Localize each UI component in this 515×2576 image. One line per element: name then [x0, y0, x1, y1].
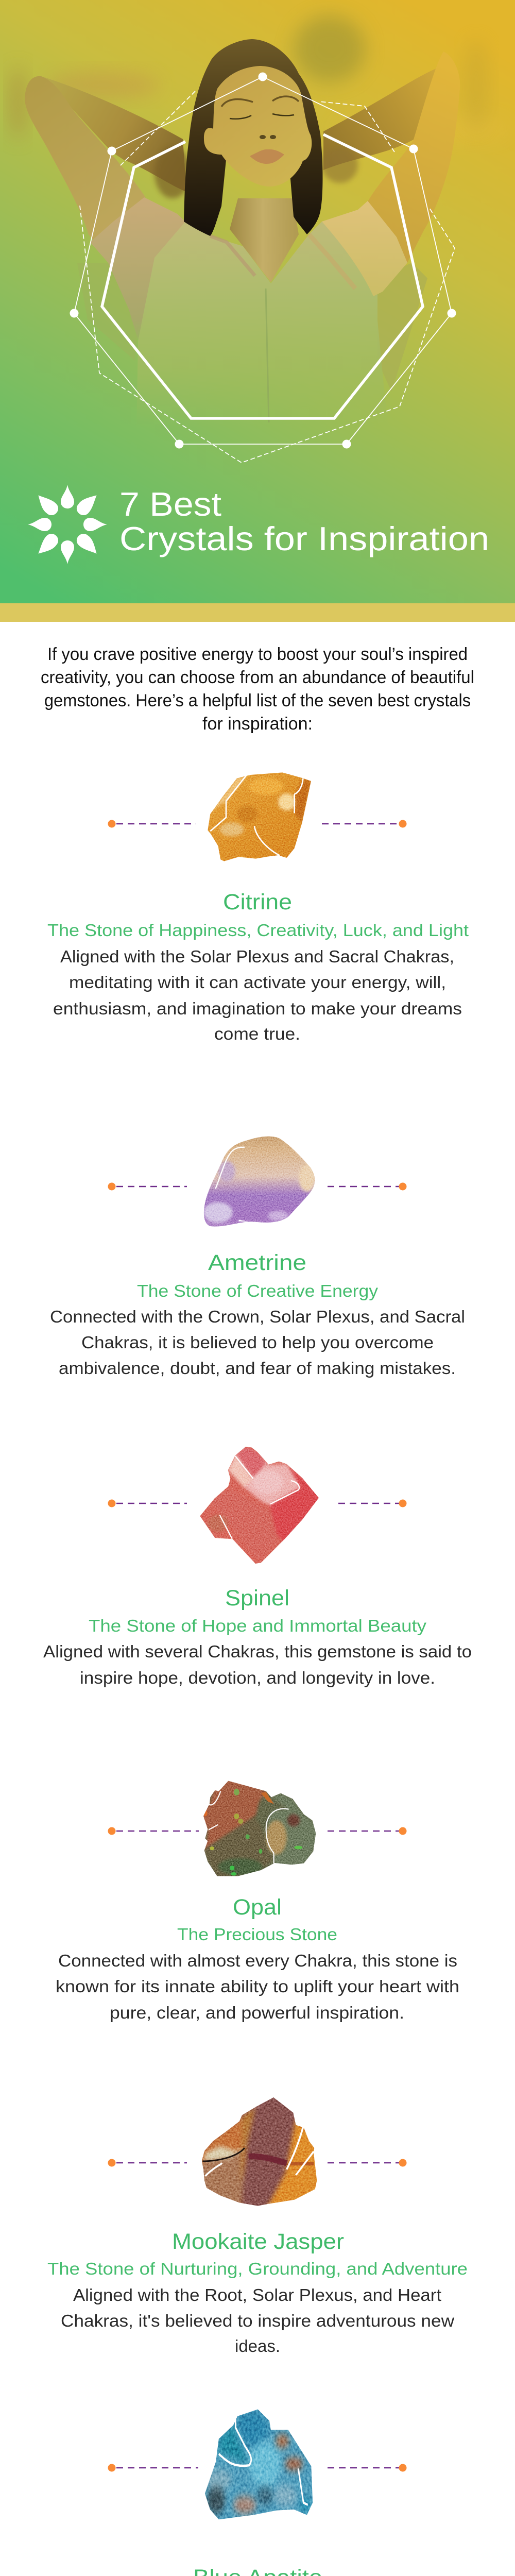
description: mookaite jasper: Chakras, it's believed to inspire adventurous new: [61, 2311, 454, 2330]
intro text: for inspiration:: [202, 714, 313, 734]
description: spinel: [43, 1642, 472, 1687]
description: ametrine: ambivalence, doubt, and fear of making mistakes.: [59, 1359, 456, 1378]
description: ametrine: [50, 1307, 465, 1378]
decorative heptagon: thick: [102, 134, 423, 418]
description: ametrine: Connected with the Crown, Solar Plexus, and Sacral: [50, 1307, 465, 1326]
heading: opal: Opal: [233, 1895, 282, 1920]
connector: citrine: [108, 820, 407, 827]
intro text: gemstones. Here’s a helpful list of the seven best crystals: [44, 691, 471, 710]
subheading: ametrine: The Stone of Creative Energy: [137, 1281, 379, 1300]
description: citrine: come true.: [214, 1024, 300, 1043]
description: opal: Connected with almost every Chakra, this stone is: [58, 1951, 457, 1970]
heading: spinel: Spinel: [225, 1586, 289, 1611]
description: spinel: Aligned with several Chakras, this gemstone is said to: [43, 1642, 472, 1661]
panel: Opal: [56, 1774, 459, 2022]
photo: woman relaxing with eyes closed: [25, 39, 460, 433]
panel: hero banner: [0, 0, 515, 622]
description: citrine: enthusiasm, and imagination to make your dreams: [53, 999, 462, 1018]
description: citrine: Aligned with the Solar Plexus and Sacral Chakras,: [60, 947, 454, 966]
icon: citrine crystal: [208, 772, 311, 861]
intro text: creativity, you can choose from an abundance of beautiful: [41, 668, 474, 687]
connector: ametrine: [108, 1183, 407, 1190]
description: mookaite jasper: ideas.: [235, 2336, 280, 2355]
panel: Blue Apatite: [108, 2409, 407, 2576]
heading: mookaite jasper: Mookaite Jasper: [172, 2229, 344, 2254]
subheading: mookaite jasper: The Stone of Nurturing, Grounding, and Adventure: [47, 2259, 468, 2278]
logo: white petal star: [28, 485, 107, 564]
decorative heptagon: thin with nodes: [70, 72, 456, 448]
intro text: [41, 645, 474, 734]
icon: ametrine crystal: [204, 1137, 315, 1227]
heading: citrine: Citrine: [223, 890, 292, 914]
heading: ametrine: Ametrine: [208, 1250, 306, 1275]
panel: Mookaite Jasper: [47, 2087, 468, 2355]
intro text: If you crave positive energy to boost your soul’s inspired: [47, 645, 468, 664]
icon: opal crystal: [203, 1781, 316, 1876]
description: mookaite jasper: [61, 2285, 454, 2355]
connector: opal: [108, 1827, 407, 1835]
description: citrine: meditating with it can activate your energy, will,: [69, 973, 446, 992]
decorative heptagon: dashed: [80, 91, 455, 463]
description: citrine: [53, 947, 462, 1043]
title: 7 Best: [119, 485, 221, 523]
description: ametrine: Chakras, it is believed to help you overcome: [81, 1333, 434, 1352]
blurred room background: [10, 15, 510, 143]
gold band: [0, 603, 515, 622]
subheading: citrine: The Stone of Happiness, Creativity, Luck, and Light: [47, 921, 469, 940]
title: [119, 485, 489, 557]
description: mookaite jasper: Aligned with the Root, Solar Plexus, and Heart: [73, 2285, 441, 2304]
description: opal: pure, clear, and powerful inspiration.: [110, 2003, 404, 2022]
subheading: opal: The Precious Stone: [177, 1925, 337, 1944]
icon: blue apatite crystal: [205, 2409, 313, 2519]
subheading: spinel: The Stone of Hope and Immortal Beauty: [89, 1616, 427, 1635]
icon: mookaite jasper crystal: [202, 2097, 317, 2206]
panel: Ametrine: [50, 1128, 465, 1378]
panel: Spinel: [43, 1439, 472, 1687]
title: Crystals for Inspiration: [119, 520, 489, 557]
icon: spinel crystal: [200, 1447, 319, 1564]
description: spinel: inspire hope, devotion, and longevity in love.: [80, 1668, 435, 1687]
panel: Citrine: [47, 766, 469, 1043]
description: opal: known for its innate ability to uplift your heart with: [56, 1977, 459, 1996]
description: opal: [56, 1951, 459, 2022]
connector: spinel: [108, 1499, 407, 1507]
connector: blue apatite: [108, 2464, 407, 2472]
connector: mookaite jasper: [108, 2159, 407, 2167]
